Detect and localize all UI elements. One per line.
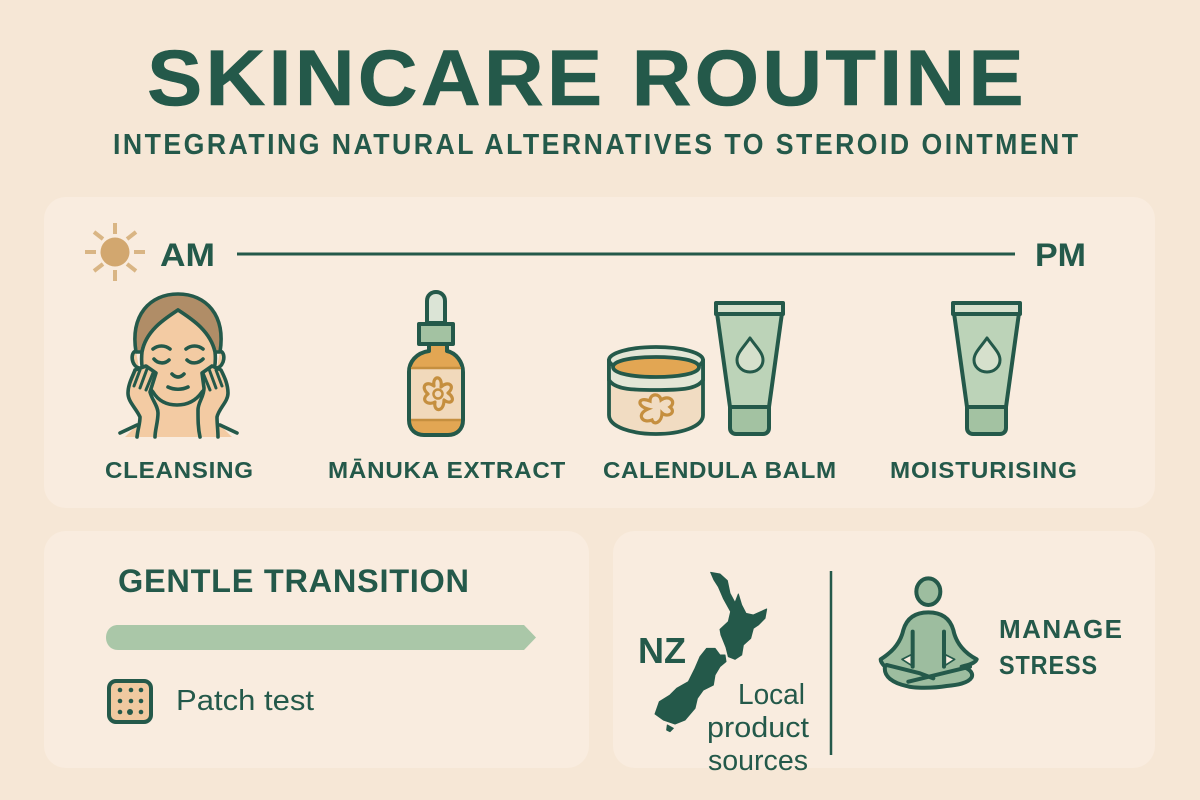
icon: dropper bottle	[409, 292, 463, 435]
text: manage stress: STRESS	[999, 652, 1097, 680]
icon: sun	[85, 223, 145, 281]
timeline line	[237, 252, 1015, 256]
text: manage stress	[999, 614, 1122, 680]
panel: gentle transition	[44, 531, 589, 768]
label: calendula balm: CALENDULA BALM	[603, 458, 836, 483]
label: manuka extract: MĀNUKA EXTRACT	[328, 458, 566, 483]
label: cleansing: CLEANSING	[105, 458, 253, 483]
icon: calendula balm jar	[609, 347, 703, 434]
text: local product sources: sources	[708, 745, 808, 777]
icon: balm tube	[716, 303, 783, 434]
text: manage stress: MANAGE	[999, 614, 1122, 644]
panel: local sources and stress	[613, 531, 1155, 777]
text: local product sources: product	[707, 712, 809, 744]
label: patch test: Patch test	[176, 685, 314, 717]
icon: meditating figure	[881, 578, 977, 688]
map: New Zealand	[655, 572, 767, 732]
label: moisturising: MOISTURISING	[890, 458, 1077, 483]
title: SKINCARE ROUTINE	[147, 35, 1024, 123]
icon: moisturiser tube	[953, 303, 1020, 434]
label: PM: PM	[1035, 237, 1086, 273]
label: AM: AM	[160, 237, 215, 273]
icon: face cleansing	[120, 294, 237, 437]
text: local product sources: Local	[738, 679, 805, 711]
label: NZ: NZ	[638, 630, 686, 671]
subtitle: INTEGRATING NATURAL ALTERNATIVES TO STEROID OINTMENT	[113, 128, 1078, 160]
text: local product sources	[707, 679, 809, 777]
panel: daily routine	[44, 197, 1155, 508]
icon: patch test	[109, 681, 151, 722]
heading: gentle transition: GENTLE TRANSITION	[118, 563, 469, 599]
progress arrow	[106, 625, 536, 650]
